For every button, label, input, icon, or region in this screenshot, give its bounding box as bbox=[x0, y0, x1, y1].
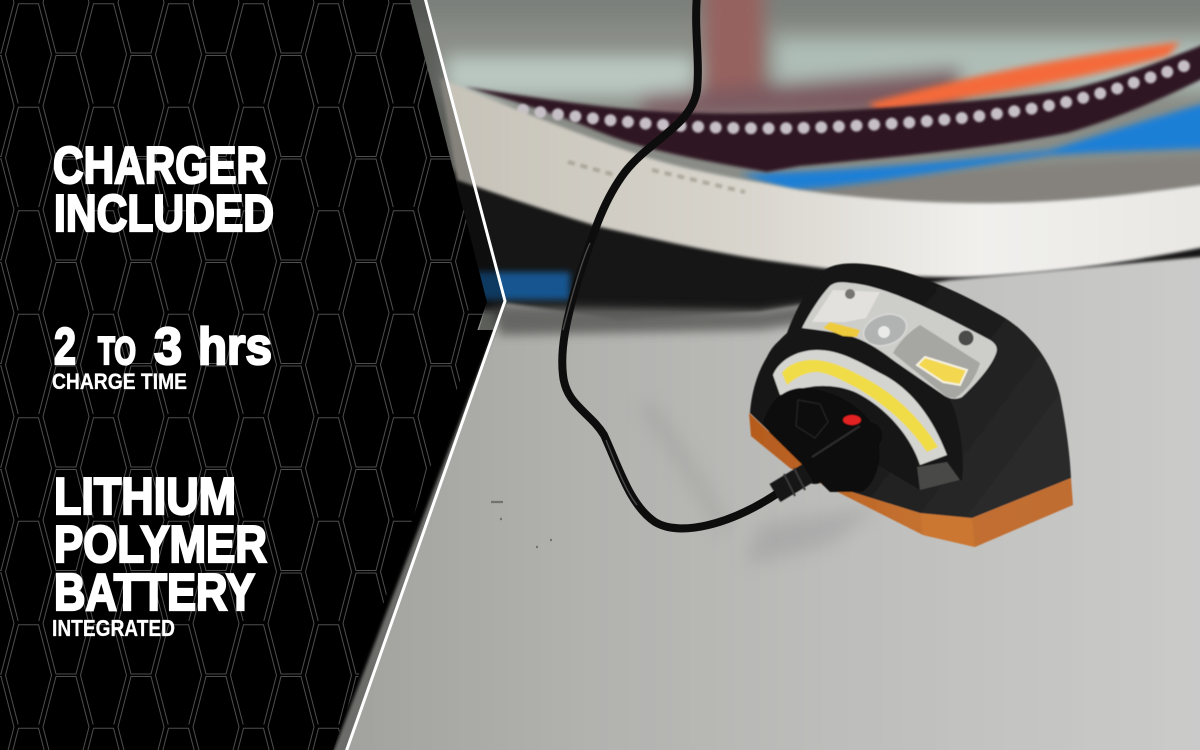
photo background: blurred workshop bbox=[400, 0, 1200, 330]
hose bead row bbox=[523, 60, 1200, 128]
white chevron outline bbox=[346, 0, 505, 750]
spec: charge time bbox=[52, 318, 272, 394]
gray band behind tube bbox=[760, 155, 1200, 205]
dark area under tube bbox=[440, 170, 1200, 312]
usb plug strain relief bbox=[775, 473, 808, 493]
cable highlight bbox=[563, 243, 637, 505]
upper lens bright window bbox=[812, 290, 880, 322]
right LED bbox=[917, 357, 967, 385]
blue hose bbox=[740, 102, 1200, 190]
left LED bbox=[823, 322, 860, 337]
left sensor dot bbox=[845, 289, 855, 299]
orange base bbox=[749, 413, 1073, 547]
sensor dot bbox=[958, 330, 974, 346]
base lower facet bbox=[920, 513, 975, 547]
spec: charger included: CHARGER bbox=[53, 137, 267, 195]
barrel highlight bbox=[812, 426, 860, 457]
spec: lithium polymer battery bbox=[52, 468, 267, 641]
charging cable bbox=[562, 0, 778, 528]
lens glint bbox=[878, 326, 890, 338]
spec: charger included bbox=[53, 137, 274, 243]
marks printed on tube bbox=[568, 162, 745, 192]
orange blurred object bbox=[868, 42, 1180, 111]
spec: lithium polymer battery: BATTERY bbox=[54, 564, 255, 622]
work surface bbox=[330, 256, 1200, 750]
lower bezel bbox=[767, 331, 963, 490]
headlamp bbox=[749, 263, 1073, 547]
spec: charge time: CHARGE TIME bbox=[52, 369, 187, 394]
blue patch behind panel tip bbox=[470, 272, 570, 300]
spec: lithium polymer battery: POLYMER bbox=[54, 516, 267, 574]
spec: charge time: hrs bbox=[198, 318, 272, 376]
black housing bbox=[750, 263, 1071, 518]
spec: lithium polymer battery: INTEGRATED bbox=[52, 615, 175, 641]
spec: charge time: 2 bbox=[54, 318, 76, 376]
white tube bbox=[440, 78, 1200, 277]
maroon braided hose bbox=[465, 42, 1200, 172]
power button bbox=[796, 400, 828, 438]
spec: charger included: INCLUDED bbox=[54, 185, 274, 243]
panel band: translucent strip beside panel bbox=[333, 0, 505, 750]
spec: charge time: TO bbox=[98, 330, 136, 373]
surface specks bbox=[491, 502, 552, 547]
center lens bbox=[859, 309, 911, 351]
usb plug barrel bbox=[815, 436, 868, 470]
yellow COB strip bbox=[782, 360, 938, 452]
panel: black hexagon-patterned spec panel bbox=[0, 0, 487, 750]
lower lens bbox=[773, 350, 947, 465]
strain relief ribs bbox=[784, 468, 805, 496]
spec: lithium polymer battery: LITHIUM bbox=[54, 468, 236, 526]
surface shadows bbox=[645, 405, 880, 565]
button panel bbox=[763, 388, 879, 492]
right reflector bbox=[893, 325, 980, 398]
upper lens bbox=[802, 282, 997, 399]
surface back edge shadow bbox=[490, 296, 860, 335]
photo: headlamp charging on a workbench bbox=[330, 0, 1200, 750]
gray plate below lens bbox=[917, 462, 960, 490]
spec: charge time: 3 bbox=[154, 318, 182, 376]
red charging LED bbox=[843, 415, 861, 425]
